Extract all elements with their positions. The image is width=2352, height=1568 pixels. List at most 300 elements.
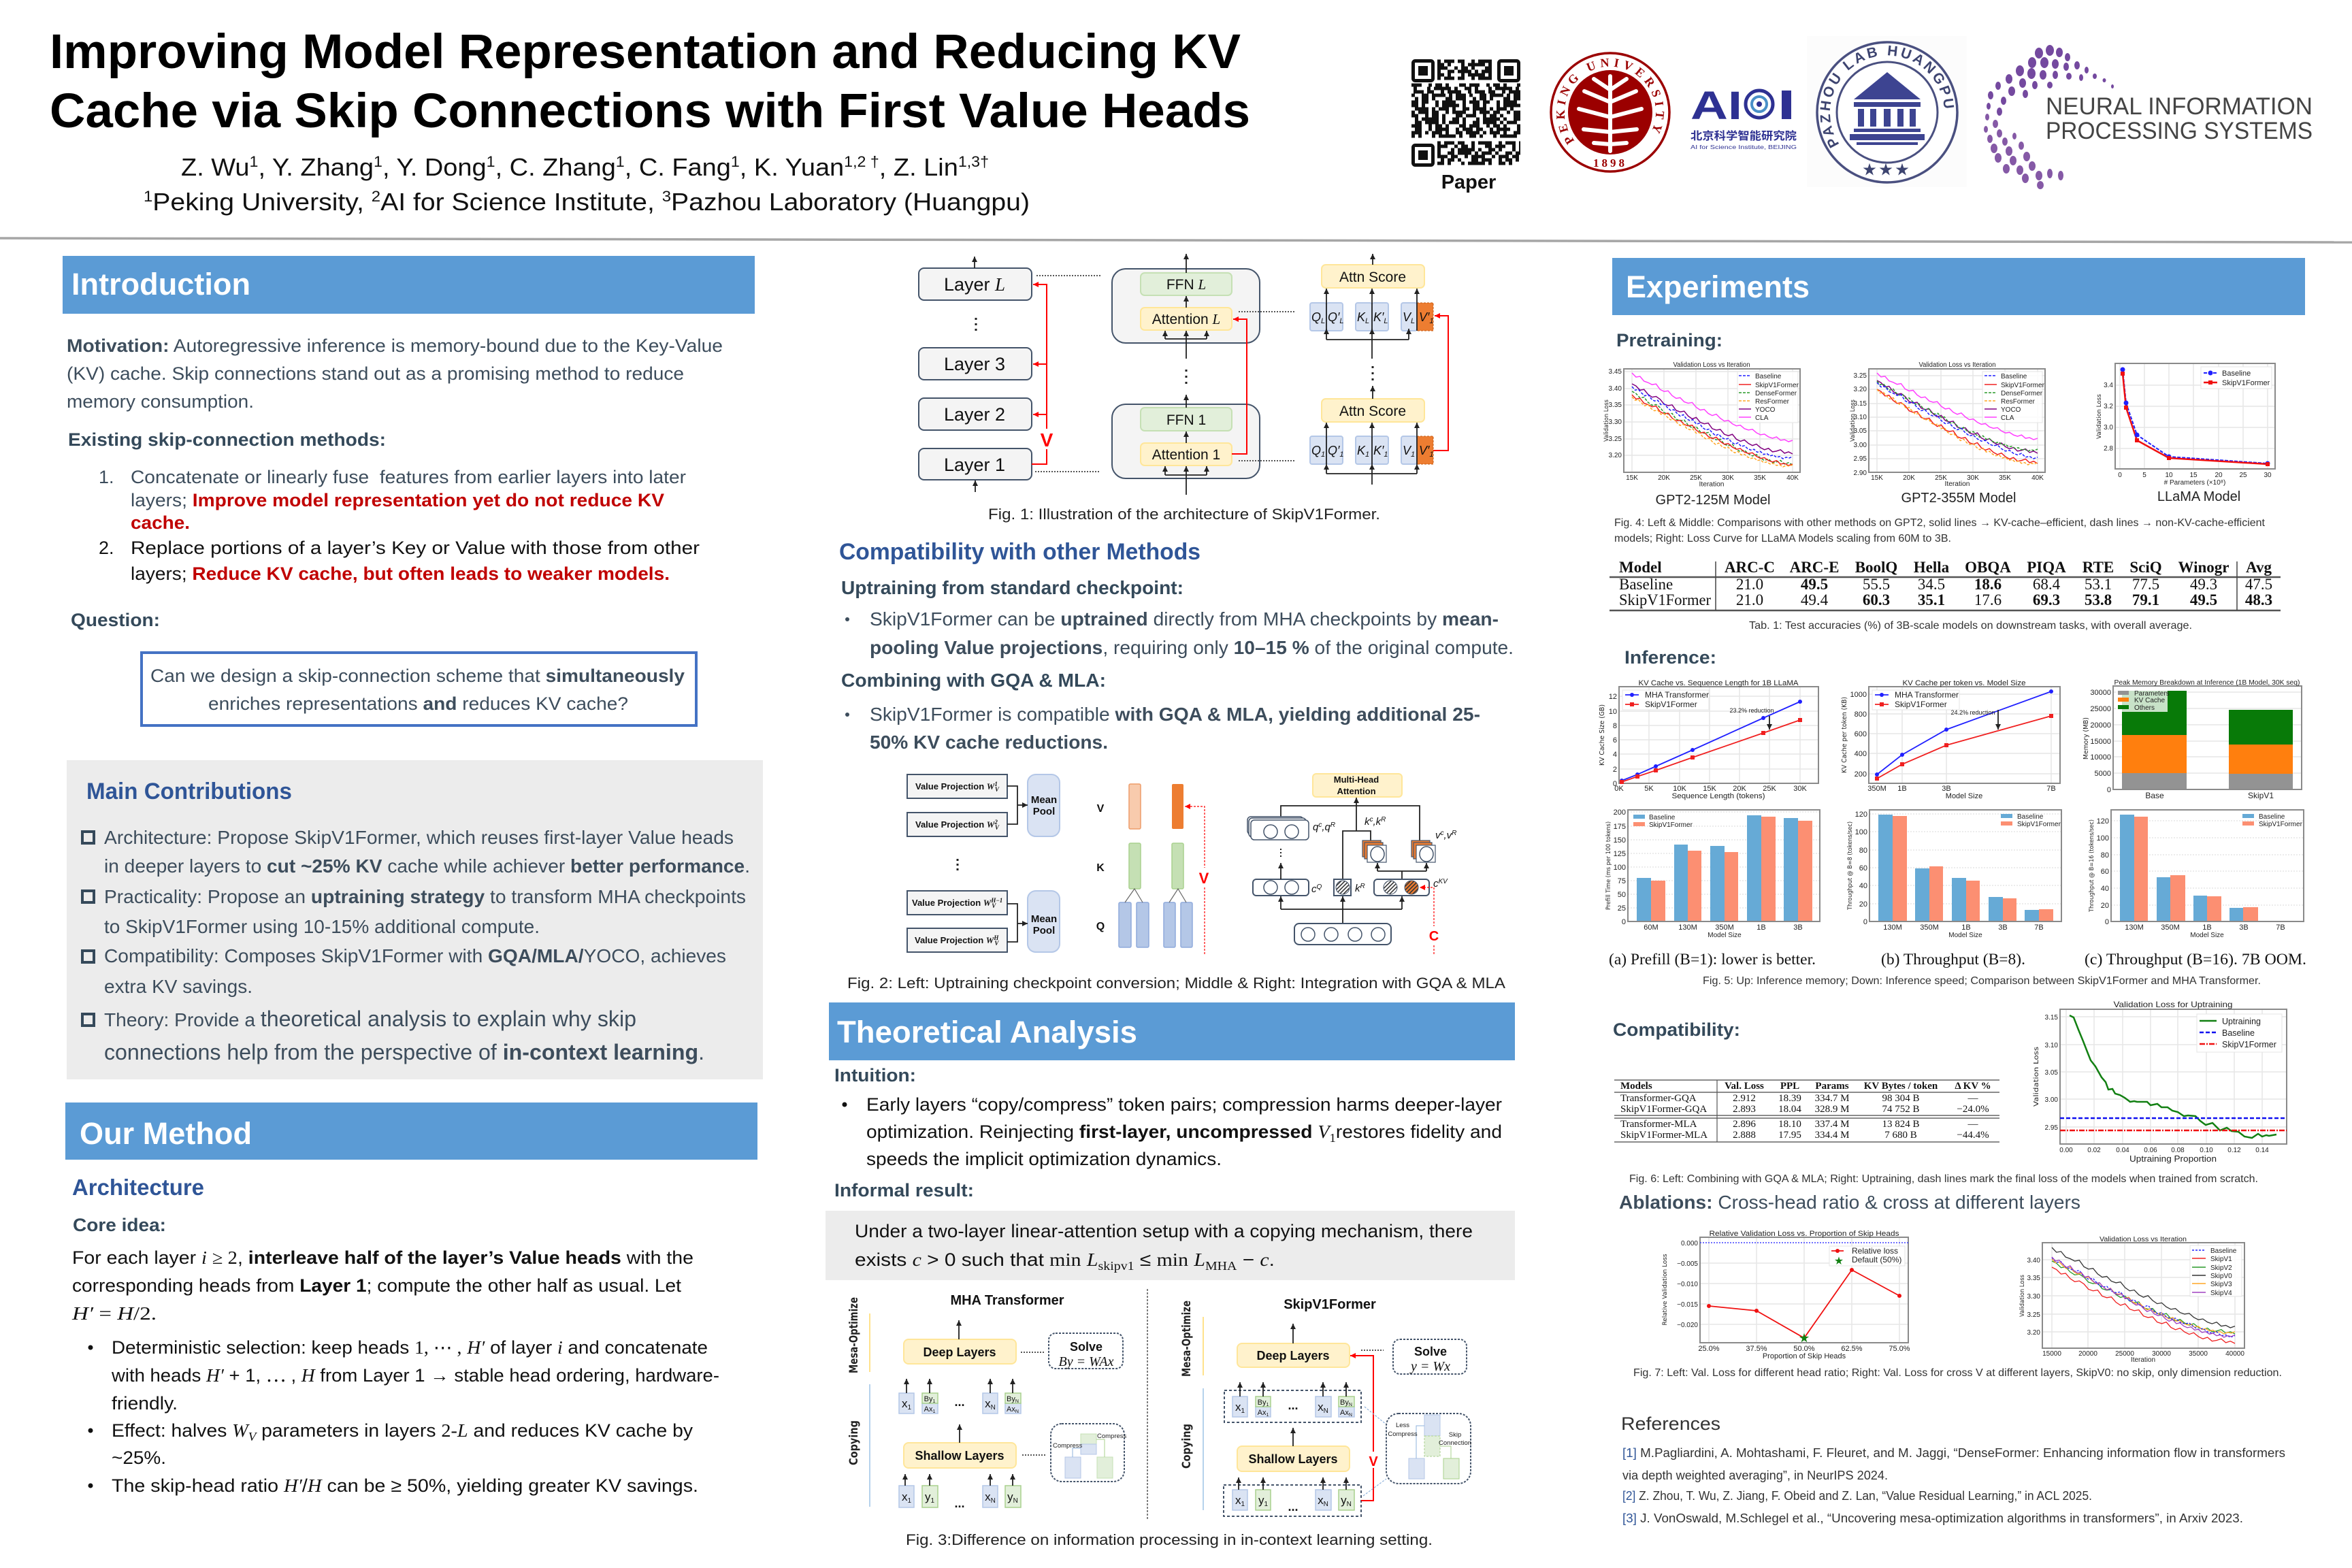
table: test accuracies: PIQA	[2027, 559, 2066, 576]
table: test accuracies: 48.3	[2245, 591, 2272, 608]
table: GQA and MLA combination: 18.39	[1778, 1093, 1801, 1104]
table: test accuracies: 17.6	[1974, 591, 2002, 608]
MHA transformer diagram: N	[1015, 1399, 1019, 1404]
chart: GPT2-355M validation loss: 2.95	[1854, 455, 1867, 463]
affiliations: 2	[372, 188, 380, 205]
chart: peak memory breakdown: Memory (MB)	[2082, 717, 2090, 760]
attention blocks: L	[1384, 317, 1388, 325]
chart labels: pretraining models: GPT2-355M Model	[1901, 491, 2016, 506]
attention blocks: Q′	[1328, 310, 1339, 324]
title: Cache via Skip Connections with First Value Heads	[50, 84, 1250, 138]
chart: GPT2-125M validation loss: 3.25	[1609, 436, 1622, 443]
chart: GPT2-125M validation loss: Iteration	[1699, 480, 1725, 489]
text: method bullets: V	[248, 1430, 257, 1443]
table: GQA and MLA combination	[1614, 1080, 1999, 1142]
chart: peak memory breakdown: 5000	[2095, 770, 2111, 778]
chart: GPT2-355M validation loss: 20K	[1903, 474, 1915, 482]
heading: architecture: Architecture	[72, 1175, 204, 1200]
text: intuition bullet: 1	[1330, 1131, 1336, 1145]
chart: validation loss by skip layer: 20000	[2078, 1350, 2097, 1358]
chart: GPT2-125M validation loss: 3.45	[1609, 368, 1622, 376]
table: GQA and MLA combination: 328.9 M	[1815, 1104, 1849, 1115]
chart: throughput batch 8 bars	[1847, 810, 2061, 939]
subheading: ablations: Ablations: Cross-head ratio & cross at different layers	[1619, 1192, 2080, 1213]
table: GQA and MLA combination: 74 752 B	[1882, 1104, 1920, 1115]
chart: KV cache vs sequence length: 0K	[1614, 785, 1624, 793]
text: reference list: [3] J. VonOswald, M.Schlegel et al., “Uncovering mesa-optimization algorithms in transformers”, in Arxiv 2023.	[1622, 1512, 2243, 1525]
MHA transformer diagram: ...	[954, 1497, 965, 1510]
chart: throughput batch 8 bars: 120	[1855, 811, 1867, 819]
logo: NeurIPS: NEURAL INFORMATION	[2046, 93, 2313, 120]
text: contribution list: in deeper layers to cut ~25% KV cache while achiever better performance.	[104, 855, 750, 877]
chart: relative validation loss vs skip heads: 0.000	[1681, 1240, 1698, 1247]
chart: LLaMA validation loss	[2096, 363, 2275, 487]
chart: uptraining validation loss: 0.10	[2200, 1147, 2213, 1154]
value projection conversion: Pool	[1033, 925, 1055, 936]
SkipV1Former diagram: y	[1341, 1494, 1347, 1507]
chart: GPT2-125M validation loss	[1603, 361, 1800, 489]
table: GQA and MLA combination: KV Bytes / token	[1864, 1081, 1938, 1092]
GQA MLA schematic: c	[1440, 830, 1444, 837]
icon: paper QR code	[1411, 59, 1520, 167]
MHA transformer diagram: x	[902, 1397, 907, 1410]
chart: validation loss by skip layer: 3.30	[2027, 1293, 2040, 1301]
table: test accuracies: ARC-C	[1725, 559, 1775, 576]
MHA transformer diagram	[847, 1293, 1127, 1510]
chart: LLaMA validation loss: 10	[2165, 472, 2173, 479]
text: existing methods: layers; Improve model representation yet do not reduce KV	[131, 490, 664, 510]
text: uptraining bullet	[845, 608, 1514, 658]
text: combining bullet: SkipV1Former is compatible with GQA & MLA, yielding additional 25-	[870, 704, 1480, 725]
caption: figure 5: Fig. 5: Up: Inference memory; Down: Inference speed; Comparison between SkipV1Former and MHA Transformer.	[1703, 975, 2261, 987]
text: motivation	[67, 336, 723, 412]
chart: relative validation loss vs skip heads	[1662, 1230, 1910, 1360]
chart: peak memory breakdown: 15000	[2090, 738, 2111, 746]
chart: throughput batch 16 bars: 20	[2101, 902, 2109, 910]
chart: uptraining validation loss: 3.15	[2045, 1014, 2058, 1022]
caption: figure 7: Fig. 7: Left: Val. Loss for different head ratio; Right: Val. Loss for cross V at different layers, SkipV0: no skip, only dimension reduction.	[1633, 1367, 2282, 1379]
chart: LLaMA validation loss: 20	[2215, 472, 2223, 479]
table: GQA and MLA combination: 13 824 B	[1882, 1119, 1920, 1130]
table: GQA and MLA combination: Transformer-MLA	[1620, 1119, 1697, 1130]
table: test accuracies: 21.0	[1736, 576, 1763, 593]
chart: throughput batch 8 bars: 0	[1863, 918, 1867, 926]
chart: KV cache per token: KV Cache per token vs. Model Size	[1903, 679, 2025, 687]
SkipV1Former diagram: N	[1347, 1501, 1352, 1508]
value projection conversion: Value Projection W	[912, 898, 991, 908]
chart: GPT2-125M validation loss: 40K	[1786, 474, 1799, 482]
table: test accuracies: 21.0	[1736, 591, 1763, 608]
chart: KV cache per token: 3B	[1942, 785, 1951, 793]
chart: KV cache vs sequence length: SkipV1Former	[1645, 700, 1697, 709]
text: method bullets	[88, 1337, 719, 1496]
text: existing methods: cache.	[131, 512, 190, 533]
SkipV1Former diagram: 1	[1266, 1413, 1269, 1418]
chart: validation loss by skip layer	[2019, 1236, 2244, 1364]
chart: prefill time bars: 175	[1614, 823, 1626, 831]
chart: uptraining validation loss: 2.95	[2045, 1124, 2058, 1132]
SkipV1Former diagram: N	[1349, 1403, 1352, 1407]
chart: GPT2-125M validation loss: 3.35	[1609, 402, 1622, 409]
text: core idea: H′ = H/2.	[71, 1303, 157, 1324]
chart: GPT2-355M validation loss: Validation Loss vs Iteration	[1919, 361, 1995, 369]
chart: GPT2-355M validation loss: 40K	[2031, 474, 2044, 482]
chart: relative validation loss vs skip heads: −0.005	[1677, 1260, 1698, 1268]
text: method bullets: with heads H′ + 1, ⋯ , H from Layer 1 → stable head ordering, hardware-	[111, 1365, 719, 1386]
SkipV1Former diagram: ...	[1288, 1399, 1298, 1412]
attention blocks: L	[1339, 317, 1344, 325]
chart: prefill time bars: Model Size	[1708, 932, 1742, 939]
chart: throughput batch 16 bars: 120	[2097, 817, 2109, 826]
paper label: Paper	[1441, 172, 1496, 193]
GQA MLA schematic: ,q	[1322, 821, 1331, 833]
attention blocks: Q	[1311, 444, 1321, 457]
text: method bullets: The skip-head ratio H′/H can be ≥ 50%, yielding greater KV savings.	[112, 1475, 698, 1496]
chart: relative validation loss vs skip heads: −0.010	[1677, 1281, 1698, 1288]
chart: KV cache vs sequence length: 0	[1613, 780, 1617, 788]
attention blocks: 1	[1365, 451, 1369, 459]
MHA transformer diagram: By = WAx	[1059, 1354, 1114, 1369]
chart: throughput batch 8 bars: Baseline	[2017, 813, 2044, 821]
logo: NeurIPS	[1984, 45, 2313, 189]
chart: GPT2-355M validation loss: 3.15	[1854, 400, 1867, 408]
table: GQA and MLA combination: −24.0%	[1957, 1104, 1989, 1115]
text: method bullets: ~25%.	[112, 1448, 166, 1468]
GQA MLA schematic: C	[1429, 929, 1439, 944]
layer stack: Layer L	[944, 274, 1005, 295]
MHA transformer diagram: y	[1007, 1490, 1013, 1503]
text: method bullets: Effect: halves W	[112, 1420, 248, 1441]
text: contribution list: Compatibility: Composes SkipV1Former with GQA/MLA/YOCO, achieves	[104, 945, 726, 966]
authors: , Y. Zhang	[258, 153, 374, 181]
table: test accuracies: 55.5	[1863, 576, 1890, 593]
SkipV1Former diagram: Mesa-Optimize	[1180, 1301, 1194, 1377]
chart: peak memory breakdown: Parameters	[2134, 690, 2170, 698]
table: test accuracies: BoolQ	[1855, 559, 1897, 576]
GQA MLA schematic: ,v	[1444, 830, 1453, 841]
caption: figure 3: Fig. 3:Difference on information processing in in-context learning setting.	[906, 1531, 1433, 1548]
chart: KV cache vs sequence length: MHA Transformer	[1645, 690, 1709, 700]
table: GQA and MLA combination: 2.896	[1733, 1119, 1756, 1130]
chart: GPT2-355M validation loss: 3.25	[1854, 372, 1867, 380]
authors: 1	[374, 153, 382, 170]
text: intuition bullet: speeds the implicit optimization dynamics.	[866, 1149, 1222, 1169]
text: contribution list	[104, 827, 750, 1064]
chart: KV cache vs sequence length: 6	[1613, 736, 1617, 745]
chart: validation loss by skip layer: Baseline	[2210, 1247, 2237, 1255]
callout: informal result: exists c > 0 such that min L	[855, 1250, 1097, 1270]
chart: GPT2-355M validation loss: 30K	[1967, 474, 1979, 482]
table: test accuracies: 18.6	[1974, 576, 2002, 593]
VKQ bars: V	[1097, 803, 1105, 815]
table: GQA and MLA combination: —	[1967, 1093, 1979, 1104]
text: reference list: [1] M.Pagliardini, A. Mohtashami, F. Fleuret, and M. Jaggi, “DenseFormer: Enhancing information flow in transformers	[1622, 1446, 2285, 1460]
chart: GPT2-125M validation loss: SkipV1Former	[1755, 382, 1799, 389]
text: contribution list: Architecture: Propose SkipV1Former, which reuses first-layer Value heads	[104, 827, 734, 848]
table: test accuracies: 49.4	[1801, 591, 1829, 608]
chart: validation loss by skip layer: 30000	[2152, 1350, 2171, 1358]
chart: throughput batch 16 bars: SkipV1Former	[2259, 821, 2303, 828]
table: test accuracies: Winogr	[2178, 559, 2229, 576]
chart: uptraining validation loss: 0.00	[2059, 1147, 2073, 1154]
text: combining bullet: 50% KV cache reductions.	[870, 732, 1108, 753]
authors: 1	[731, 153, 740, 170]
authors: , Z. Lin	[879, 153, 958, 181]
chart: prefill time bars: 150	[1614, 836, 1626, 845]
subheading: uptraining: Uptraining from standard checkpoint:	[841, 577, 1183, 598]
chart: validation loss by skip layer: 3.25	[2027, 1311, 2040, 1319]
caption: figure 4: models; Right: Loss Curve for LLaMA Models scaling from 60M to 3B.	[1614, 533, 1951, 544]
subheading: pretraining: Pretraining:	[1616, 330, 1722, 350]
MHA transformer diagram: N	[1015, 1409, 1019, 1414]
SkipV1Former diagram: y	[1258, 1494, 1264, 1507]
table: test accuracies: 34.5	[1918, 576, 1945, 593]
MHA transformer diagram: x	[902, 1490, 907, 1503]
chart: throughput batch 16 bars: 3B	[2239, 924, 2249, 932]
SkipV1Former diagram: 1	[1264, 1501, 1268, 1508]
text: existing methods: 1.	[99, 467, 114, 487]
chart: GPT2-355M validation loss: ResFormer	[2001, 398, 2036, 406]
chart: KV cache vs sequence length: 20K	[1733, 785, 1746, 793]
table: GQA and MLA combination: Params	[1815, 1081, 1849, 1092]
authors: , C. Fang	[625, 153, 731, 181]
chart captions: inference speed: (b) Throughput (B=8).	[1881, 951, 2025, 968]
heading: introduction	[63, 256, 755, 314]
attention blocks: V′	[1419, 310, 1429, 324]
callout: informal result: MHA	[1205, 1259, 1237, 1273]
chart: GPT2-355M validation loss: Validation Loss	[1850, 399, 1857, 442]
table: test accuracies: 49.3	[2190, 576, 2217, 593]
subheading: inference: Inference:	[1624, 647, 1716, 668]
chart: GPT2-355M validation loss: YOCO	[2001, 406, 2021, 414]
title	[50, 25, 1250, 138]
layer internals: FFN L	[1166, 276, 1206, 293]
table: test accuracies: 49.5	[2190, 591, 2217, 608]
table: test accuracies: 47.5	[2245, 576, 2272, 593]
affiliations: AI for Science Institute,	[380, 188, 662, 216]
chart: peak memory breakdown: SkipV1	[2248, 791, 2274, 800]
VKQ bars: K	[1096, 862, 1105, 874]
chart: relative validation loss vs skip heads: 62.5%	[1841, 1345, 1863, 1353]
layer internals: Attention L	[1152, 311, 1220, 327]
layer internals: Attention 1	[1152, 447, 1220, 463]
chart: peak memory breakdown: Others	[2134, 704, 2155, 712]
chart: GPT2-125M validation loss: 3.40	[1609, 385, 1622, 393]
logo: Pazhou Lab Huangpu: ★★★	[1863, 163, 1912, 178]
caption: figure 6: Fig. 6: Left: Combining with GQA & MLA; Right: Uptraining, dash lines mark the final loss of the models when trained from scratch.	[1629, 1173, 2258, 1185]
GQA MLA schematic: k	[1365, 816, 1369, 828]
attention blocks: V′	[1419, 444, 1429, 457]
text: method bullets: 2-L and reduces KV cache by	[441, 1420, 683, 1441]
text: motivation: memory consumption.	[67, 391, 254, 412]
text: intuition bullet: restores fidelity and	[1336, 1122, 1502, 1142]
chart: prefill time bars: 60M	[1644, 924, 1659, 932]
chart: relative validation loss vs skip heads: Proportion of Skip Heads	[1763, 1352, 1846, 1360]
value projection conversion: V	[995, 824, 1000, 831]
GQA MLA schematic: v	[1435, 830, 1440, 841]
MHA transformer diagram: Compress	[1053, 1442, 1083, 1450]
chart: uptraining validation loss: SkipV1Former	[2222, 1040, 2276, 1049]
chart: GPT2-125M validation loss: 15K	[1626, 474, 1638, 482]
chart: throughput batch 8 bars: SkipV1Former	[2017, 821, 2061, 828]
chart: KV cache vs sequence length: Sequence Length (tokens)	[1671, 792, 1765, 800]
affiliations: Pazhou Laboratory (Huangpu)	[671, 188, 1030, 216]
chart captions: inference speed	[1609, 951, 2306, 968]
VKQ bars: Q	[1096, 921, 1105, 932]
MHA transformer diagram: 1	[930, 1497, 934, 1505]
chart: GPT2-355M validation loss: DenseFormer	[2001, 390, 2043, 397]
text: existing methods: 2.	[99, 538, 114, 558]
chart: throughput batch 8 bars: Throughput @ B=8 (tokens/sec)	[1847, 821, 1854, 911]
value projection conversion: H	[993, 934, 999, 941]
callout: informal result	[826, 1211, 1515, 1280]
chart: throughput batch 8 bars: 7B	[2034, 924, 2044, 932]
chart: prefill time bars: 50	[1618, 891, 1626, 899]
chart: KV cache per token: MHA Transformer	[1895, 690, 1959, 700]
chart: KV cache vs sequence length: 10	[1609, 708, 1617, 716]
chart: KV cache vs sequence length: 12	[1609, 693, 1617, 701]
MHA transformer diagram: ...	[954, 1395, 965, 1409]
chart: uptraining validation loss: 0.04	[2116, 1147, 2129, 1154]
chart: uptraining validation loss: 3.05	[2045, 1069, 2058, 1077]
table: GQA and MLA combination: 98 304 B	[1882, 1093, 1920, 1104]
chart: LLaMA validation loss: 3.2	[2104, 403, 2113, 410]
table: test accuracies: Avg	[2246, 559, 2272, 576]
callout: informal result: Under a two-layer linear-attention setup with a copying mechanism, there	[855, 1221, 1473, 1241]
chart: validation loss by skip layer: Iteration	[2131, 1356, 2155, 1364]
caption: figure 2: Fig. 2: Left: Uptraining checkpoint conversion; Middle & Right: Integration with GQA & MLA	[847, 975, 1505, 992]
chart: validation loss by skip layer: SkipV4	[2210, 1290, 2232, 1297]
chart: KV cache per token: 350M	[1867, 785, 1886, 793]
figure 1: architecture diagram	[919, 254, 1448, 495]
text: intuition bullet: optimization. Reinjecting first-layer, uncompressed V	[866, 1122, 1329, 1142]
chart: validation loss by skip layer: 35000	[2189, 1350, 2208, 1358]
GQA MLA schematic: R	[1330, 821, 1335, 829]
text: existing methods: Existing skip-connection methods:	[68, 429, 386, 450]
chart: GPT2-355M validation loss: 15K	[1871, 474, 1883, 482]
SkipV1Former diagram: Less	[1396, 1422, 1409, 1429]
text: combining bullet	[845, 704, 1480, 753]
attention blocks: K	[1357, 310, 1365, 324]
chart: KV cache per token: 800	[1855, 710, 1867, 719]
chart: GPT2-355M validation loss: 2.90	[1854, 470, 1867, 477]
text: uptraining bullet: pooling Value projections, requiring only 10–15 % of the original compute.	[870, 637, 1514, 658]
chart: uptraining validation loss: 0.08	[2171, 1147, 2185, 1154]
chart: KV cache per token: 1B	[1897, 785, 1907, 793]
chart labels: pretraining models: GPT2-125M Model	[1656, 493, 1770, 508]
authors: 1	[616, 153, 625, 170]
chart: peak memory breakdown: 20000	[2090, 721, 2111, 730]
figure 3: information processing comparison	[847, 1289, 1471, 1520]
table: GQA and MLA combination: 7 680 B	[1884, 1130, 1917, 1141]
SkipV1Former diagram: N	[1349, 1413, 1352, 1418]
caption: figure 1: Fig. 1: Illustration of the architecture of SkipV1Former.	[988, 506, 1380, 523]
chart: GPT2-125M validation loss: 3.20	[1609, 452, 1622, 459]
chart: GPT2-125M validation loss: 20K	[1658, 474, 1670, 482]
text: motivation: (KV) cache. Skip connections stand out as a promising method to reduce	[67, 363, 684, 384]
SkipV1Former diagram: V	[1369, 1454, 1378, 1469]
SkipV1Former diagram: Deep Layers	[1256, 1349, 1330, 1362]
GQA MLA schematic: c	[1318, 821, 1322, 829]
GQA MLA schematic: R	[1381, 816, 1386, 823]
chart: throughput batch 16 bars	[2089, 810, 2304, 939]
chart: throughput batch 16 bars: 130M	[2125, 924, 2144, 932]
layer stack: Layer 1	[944, 455, 1005, 475]
caption: figure 4: Fig. 4: Left & Middle: Comparisons with other methods on GPT2, solid lines → KV-cache–efficient, dash lines → non-KV-cache-efficient	[1614, 517, 2266, 529]
SkipV1Former diagram: N	[1324, 1501, 1328, 1508]
chart: KV cache per token: 600	[1855, 730, 1867, 738]
MHA transformer diagram: Shallow Layers	[915, 1449, 1004, 1463]
heading: references: References	[1621, 1414, 1720, 1434]
attention blocks: V	[1403, 310, 1411, 324]
chart: validation loss by skip layer: SkipV3	[2210, 1281, 2232, 1288]
table: GQA and MLA combination: —	[1967, 1119, 1979, 1130]
table: test accuracies: OBQA	[1965, 559, 2011, 576]
chart: KV cache vs sequence length: 15K	[1703, 785, 1716, 793]
chart: prefill time bars: 25	[1618, 904, 1626, 913]
MHA transformer diagram: N	[991, 1497, 996, 1505]
chart: throughput batch 16 bars: 1B	[2202, 924, 2212, 932]
chart: relative validation loss vs skip heads: Relative Validation Loss	[1662, 1254, 1669, 1326]
attention blocks: 1	[1411, 451, 1415, 459]
chart: GPT2-125M validation loss: Baseline	[1755, 373, 1782, 380]
chart: LLaMA validation loss: SkipV1Former	[2222, 379, 2270, 387]
table: test accuracies: 60.3	[1863, 591, 1890, 608]
MHA transformer diagram: MHA Transformer	[950, 1293, 1064, 1308]
value projection conversion: H−1	[990, 897, 1002, 904]
chart: GPT2-125M validation loss: 30K	[1722, 474, 1734, 482]
value projection conversion: V	[992, 902, 996, 909]
heading: experiments	[1612, 258, 2305, 315]
GQA MLA schematic: c	[1369, 816, 1373, 823]
MHA transformer diagram: Solve	[1070, 1340, 1102, 1354]
SkipV1Former diagram: x	[1235, 1494, 1241, 1507]
chart: prefill time bars: 100	[1614, 864, 1626, 872]
MHA transformer diagram: 1	[932, 1399, 935, 1404]
chart: GPT2-125M validation loss: ResFormer	[1755, 398, 1790, 406]
chart: prefill time bars: 1B	[1757, 924, 1766, 932]
chart: KV cache per token: Model Size	[1946, 792, 1982, 800]
chart: relative validation loss vs skip heads: 37.5%	[1746, 1345, 1767, 1353]
authors: Z. Wu	[181, 153, 246, 181]
GQA MLA schematic: KV	[1439, 878, 1448, 885]
logo: AI for Science Institute: AI for Science Institute, BEIJING	[1690, 144, 1797, 150]
table: test accuracies: 35.1	[1918, 591, 1945, 608]
SkipV1Former diagram: Compress	[1388, 1431, 1418, 1438]
chart: prefill time bars: Prefill Time (ms per 100 tokens)	[1605, 821, 1612, 910]
table: GQA and MLA combination: SkipV1Former-GQA	[1620, 1104, 1707, 1115]
chart: peak memory breakdown: 10000	[2090, 753, 2111, 762]
callout: research question: enriches representations and reduces KV cache?	[208, 693, 628, 714]
text: existing methods: layers; Reduce KV cache, but often leads to weaker models.	[131, 564, 670, 584]
chart: throughput batch 8 bars: Model Size	[1948, 932, 1982, 939]
text: method bullets: Deterministic selection: keep heads 1, ⋯ , H′ of layer i and concatenate	[112, 1337, 708, 1358]
SkipV1Former diagram: 1	[1241, 1501, 1245, 1508]
text: contribution list: Practicality: Propose an uptraining strategy to transform MHA checkpoints	[104, 886, 746, 907]
GQA MLA schematic: Multi-Head	[1334, 774, 1379, 785]
table: GQA and MLA combination: 18.04	[1778, 1104, 1801, 1115]
chart: throughput batch 16 bars: Baseline	[2259, 813, 2285, 821]
chart: throughput batch 8 bars: 3B	[1998, 924, 2008, 932]
VKQ bars	[1096, 784, 1213, 954]
chart: LLaMA validation loss: Baseline	[2222, 370, 2251, 378]
table: GQA and MLA combination: 334.7 M	[1815, 1093, 1849, 1104]
callout: informal result: min L	[1157, 1250, 1204, 1270]
attention blocks: K′	[1373, 310, 1384, 324]
chart: uptraining validation loss: Validation Loss for Uptraining	[2114, 1000, 2232, 1009]
chart: uptraining validation loss: 0.14	[2255, 1147, 2269, 1154]
chart: GPT2-355M validation loss: 3.20	[1854, 386, 1867, 393]
